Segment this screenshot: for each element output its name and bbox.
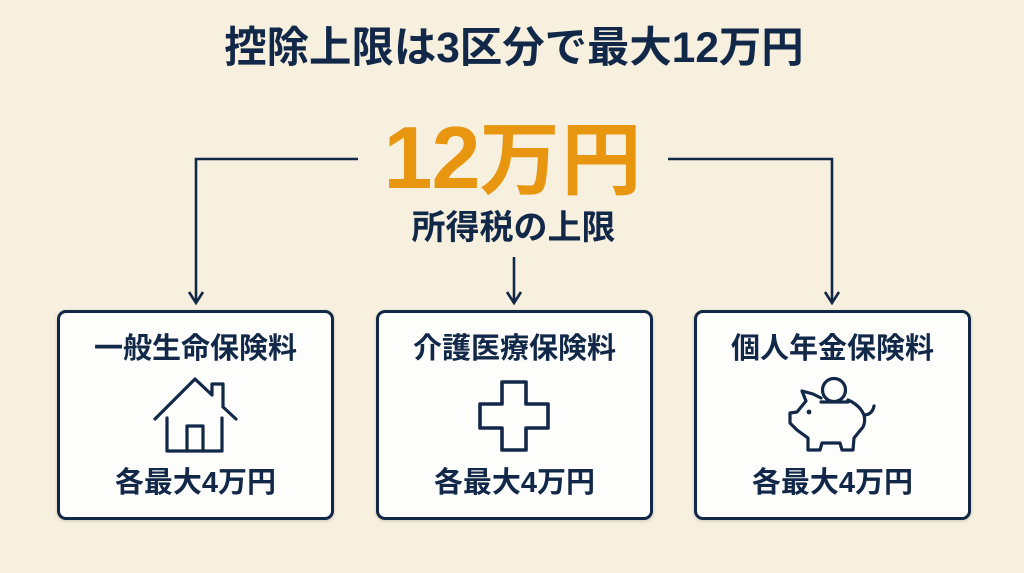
amount: individual pension insurance: 各最大4万円 (752, 467, 913, 499)
panel: life insurance (57, 310, 334, 520)
panel: individual pension insurance (694, 310, 971, 520)
heading: life insurance: 一般生命保険料 (94, 333, 297, 365)
subtitle: income tax limit: 所得税の上限 (412, 209, 616, 247)
big amount: 12万円: 12万円 (384, 108, 643, 207)
heading: nursing and medical insurance: 介護医療保険料 (413, 333, 616, 365)
panel: nursing and medical insurance (376, 310, 653, 520)
title: 控除上限は3区分で最大12万円 (224, 24, 804, 71)
amount: nursing and medical insurance: 各最大4万円 (434, 467, 595, 499)
amount: life insurance: 各最大4万円 (115, 467, 276, 499)
heading: individual pension insurance: 個人年金保険料 (731, 333, 934, 365)
